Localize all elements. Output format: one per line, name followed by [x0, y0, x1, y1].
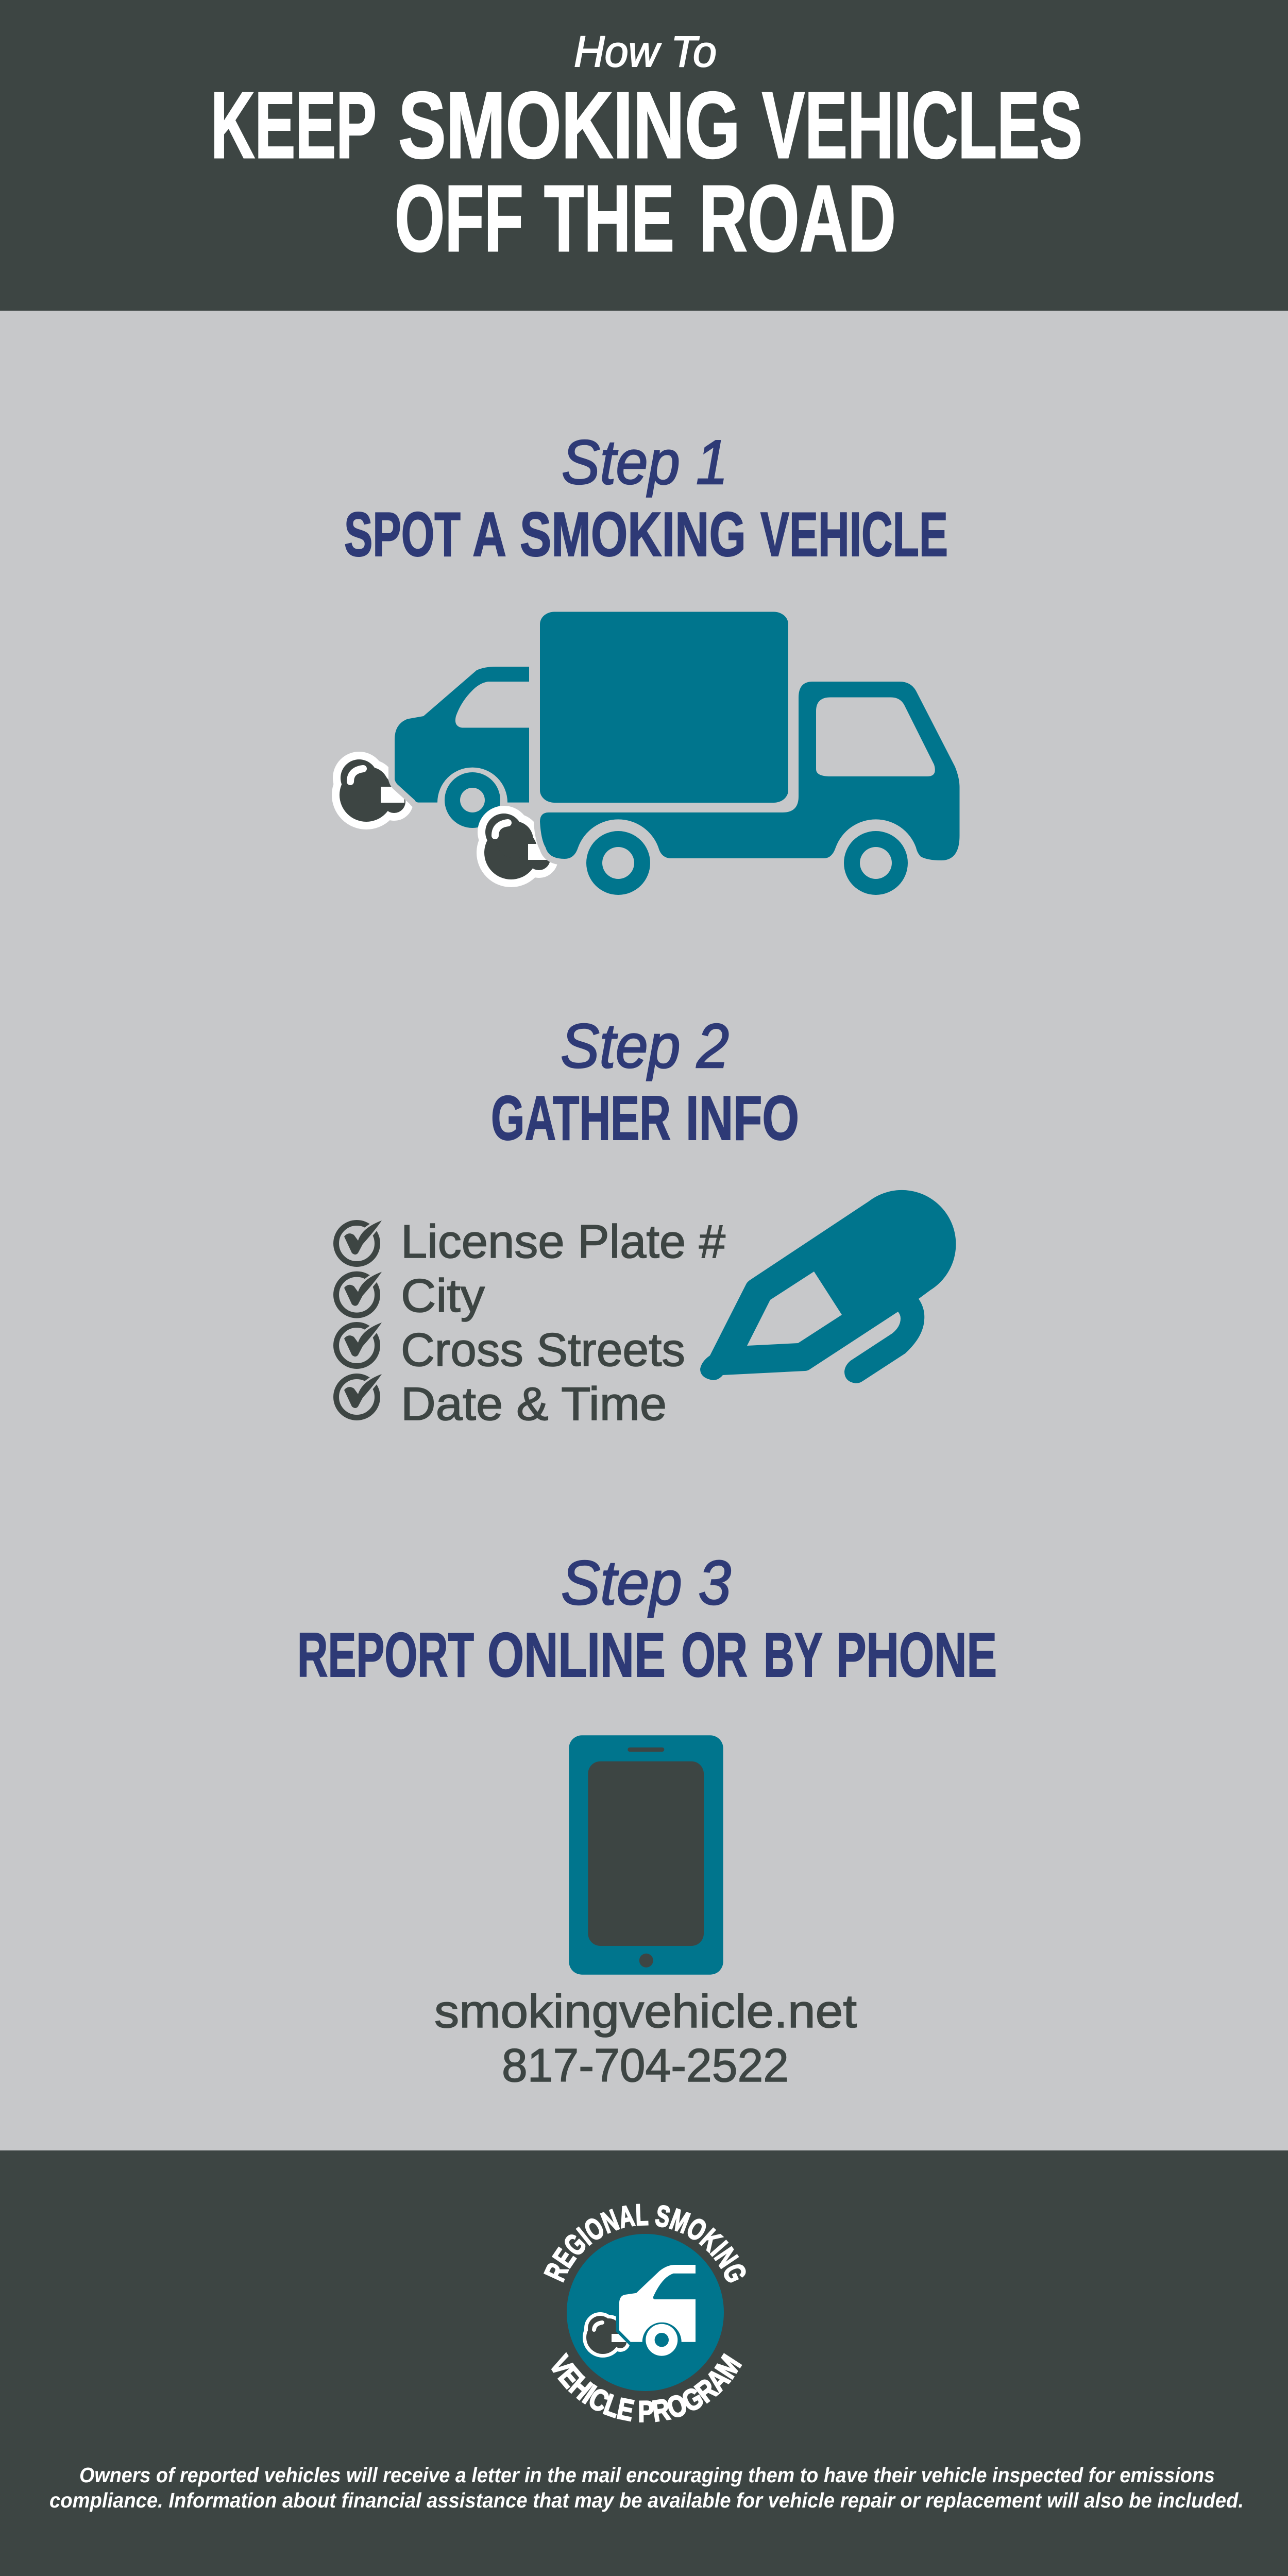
step 1 heading: A	[472, 499, 506, 569]
step 3 heading: Step 3	[561, 1548, 731, 1618]
step 3 heading: PHONE	[836, 1620, 997, 1690]
title: VEHICLES	[762, 72, 1082, 178]
step 3 heading: BY	[764, 1620, 823, 1690]
contact details: 817-704-2522	[502, 2040, 789, 2092]
step 1 heading: Step 1	[562, 427, 728, 497]
logo car	[619, 2265, 696, 2356]
icon: smoke puff front	[484, 814, 552, 879]
logo: regional smoking vehicle program	[544, 2204, 746, 2422]
footer note	[49, 2463, 1244, 2512]
step 1 heading: SMOKING	[520, 499, 746, 569]
contact details: smokingvehicle.net	[434, 1986, 857, 2038]
step 1 heading	[344, 427, 948, 569]
icon: front truck	[540, 612, 959, 895]
contact details	[434, 1986, 857, 2092]
title: THE	[544, 165, 674, 271]
title	[211, 72, 1082, 271]
step 3 heading	[297, 1548, 997, 1690]
icon: pen	[700, 1190, 956, 1383]
icon: phone	[569, 1735, 723, 1975]
checklist text: Cross Streets	[401, 1324, 685, 1376]
step 3 heading: REPORT	[297, 1620, 474, 1690]
step 3 heading: OR	[681, 1620, 748, 1690]
icon: check 1	[336, 1221, 382, 1264]
icon: check 4	[336, 1374, 382, 1418]
panel: footer	[0, 2150, 1288, 2576]
logo text bottom: VEHICLE PROGRAM	[551, 2352, 742, 2422]
footer note: Owners of reported vehicles will receive a letter in the mail encouraging them to have their vehicle inspected for emissions	[79, 2463, 1215, 2487]
icon: smoking truck	[340, 612, 959, 895]
step 3 heading: ONLINE	[487, 1620, 666, 1690]
title: ROAD	[699, 165, 896, 271]
title: OFF	[395, 165, 523, 271]
step 1 heading: SPOT	[344, 499, 461, 569]
icon: rear truck	[395, 667, 529, 828]
icon: smoke puff rear	[340, 759, 405, 822]
checklist text: City	[401, 1270, 485, 1322]
checklist text: Date & Time	[401, 1378, 667, 1430]
step 1 heading: VEHICLE	[760, 499, 948, 569]
checklist text	[401, 1216, 725, 1430]
logo smoke	[586, 2316, 626, 2354]
title: SMOKING	[398, 72, 740, 178]
checklist	[336, 1216, 725, 1430]
title kicker: How To	[574, 27, 717, 76]
checklist text: License Plate #	[401, 1216, 725, 1268]
icon: check 3	[336, 1323, 382, 1366]
icon: check 2	[336, 1272, 382, 1315]
step 2 heading: Step 2	[561, 1011, 729, 1081]
panel: header	[0, 0, 1288, 311]
step 2 heading: INFO	[686, 1083, 799, 1153]
step 2 heading: GATHER	[491, 1083, 671, 1153]
logo text top: REGIONAL SMOKING	[544, 2204, 746, 2283]
step 2 heading	[491, 1011, 799, 1153]
title: KEEP	[211, 72, 377, 178]
